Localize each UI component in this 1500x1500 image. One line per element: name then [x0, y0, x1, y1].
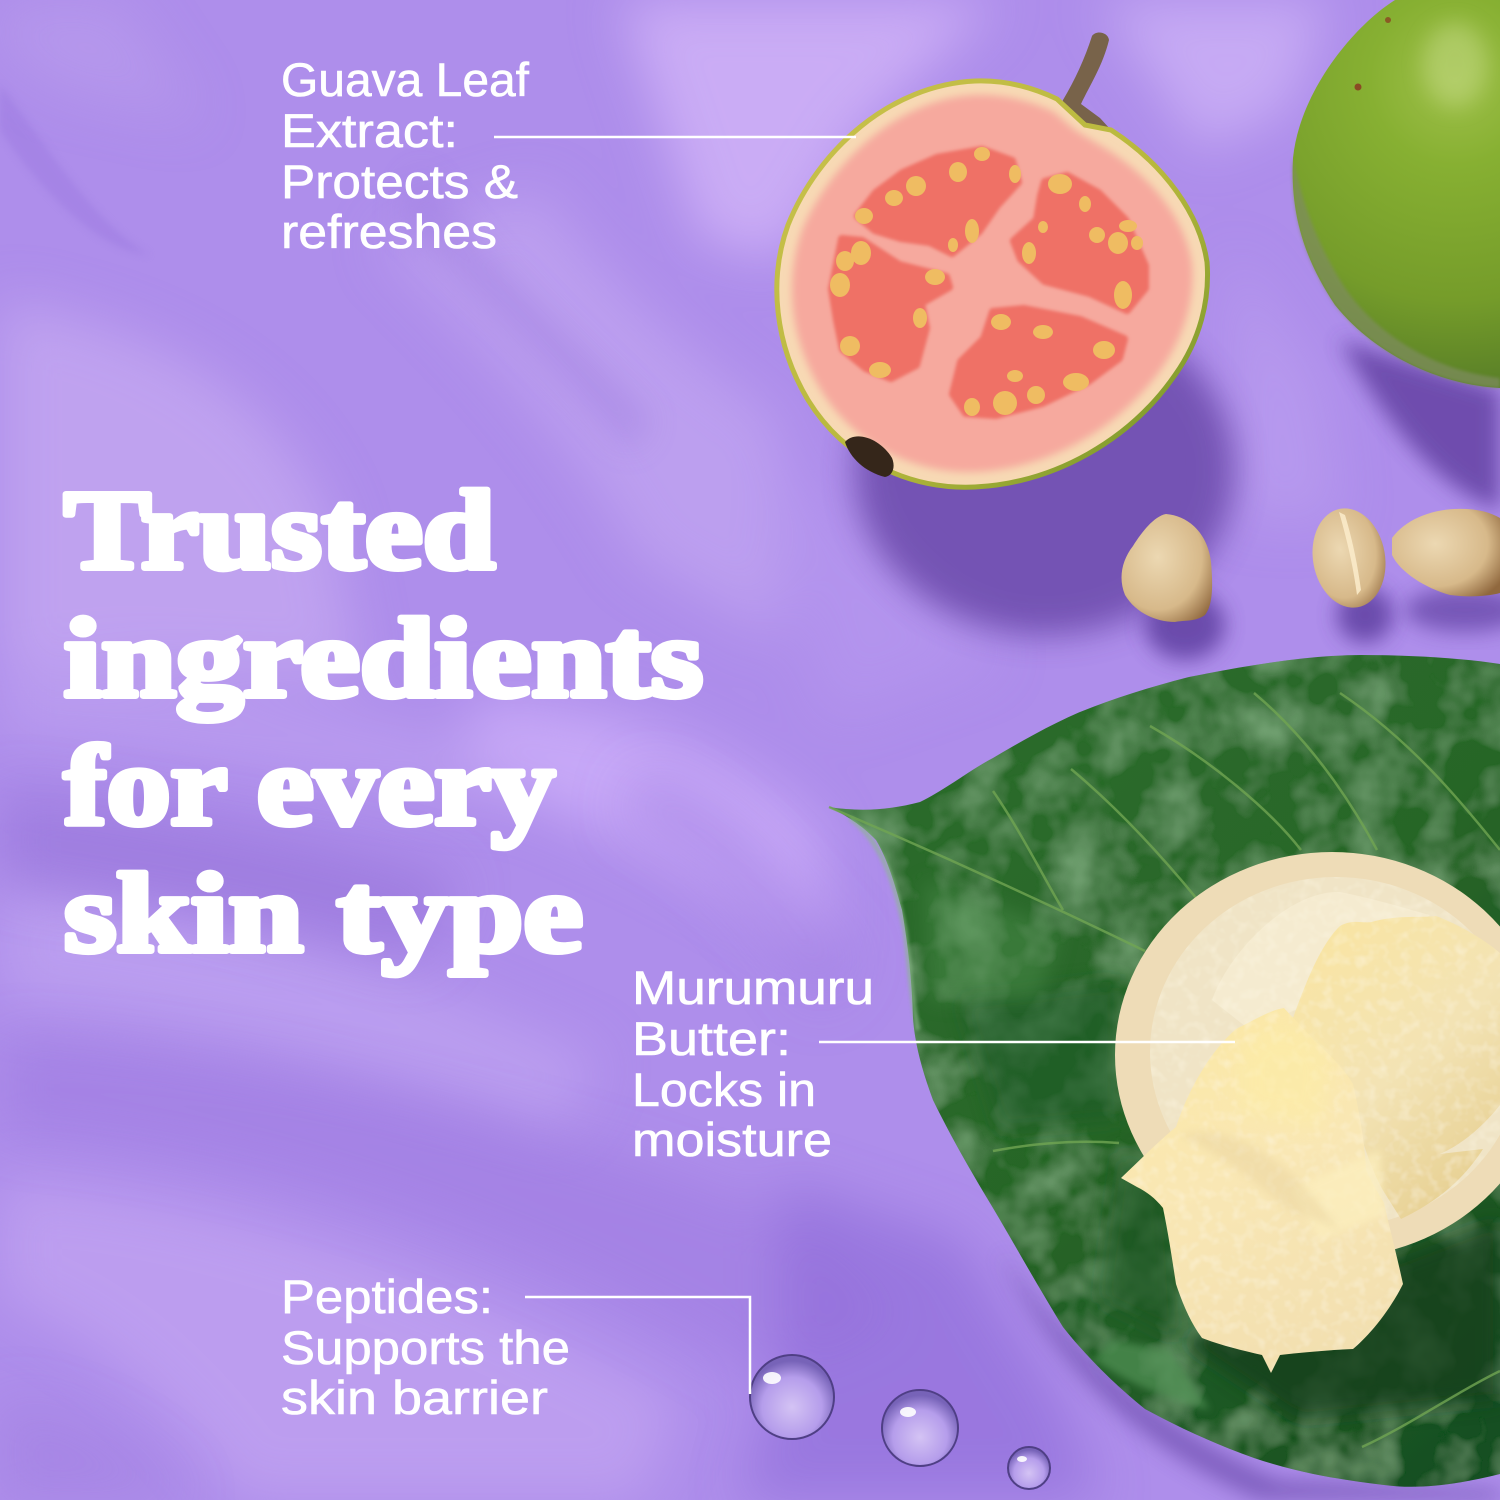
pulp segments	[832, 150, 1145, 415]
title: for every	[64, 724, 555, 849]
callout: peptides: Peptides:	[281, 1270, 493, 1323]
title: Trusted	[64, 468, 495, 593]
guava half	[777, 33, 1208, 487]
title: ingredients	[64, 596, 703, 721]
callout: guava leaf extract	[281, 53, 530, 258]
bowl of butter	[1115, 852, 1500, 1373]
callout: murumuru butter: Murumuru	[632, 961, 874, 1014]
butter highlights	[1240, 1029, 1330, 1130]
flesh	[792, 95, 1193, 472]
leader line: guava	[494, 136, 856, 138]
callout: murumuru butter	[632, 961, 874, 1166]
callout: guava leaf extract: Guava Leaf	[281, 53, 530, 106]
bowl rim	[1115, 852, 1500, 1258]
leaf shading	[960, 980, 1120, 1130]
butter lump front	[1121, 1008, 1403, 1373]
callout: guava leaf extract: Protects &	[281, 155, 518, 208]
callout: peptides: skin barrier	[281, 1371, 548, 1424]
callout: guava leaf extract: refreshes	[281, 205, 497, 258]
callout: murumuru butter: Locks in	[632, 1063, 816, 1116]
callout: murumuru butter: Butter:	[632, 1012, 791, 1065]
shadows under the fruit and leaf	[855, 305, 1500, 1500]
water droplets	[750, 1355, 1050, 1489]
stem	[1060, 33, 1111, 130]
blossom end	[845, 436, 894, 477]
seeds	[830, 147, 1143, 416]
callout: murumuru butter: moisture	[632, 1113, 832, 1166]
whole guava	[1293, 0, 1500, 388]
leaf	[829, 655, 1500, 1487]
leader line: butter	[819, 1041, 1235, 1043]
title	[64, 468, 703, 976]
leaf edge highlight	[850, 818, 918, 1030]
title: skin type	[64, 851, 583, 976]
callout: peptides	[281, 1270, 570, 1424]
leader line: peptides	[525, 1297, 750, 1394]
callout: peptides: Supports the	[281, 1321, 570, 1374]
granular butter	[1212, 892, 1430, 1030]
bowl interior	[1150, 877, 1500, 1227]
callout: guava leaf extract: Extract:	[281, 104, 458, 157]
skin and rind	[777, 81, 1208, 487]
nuts	[1122, 503, 1500, 622]
leaf veins	[829, 693, 1500, 1447]
butter lump back	[1293, 916, 1500, 1219]
